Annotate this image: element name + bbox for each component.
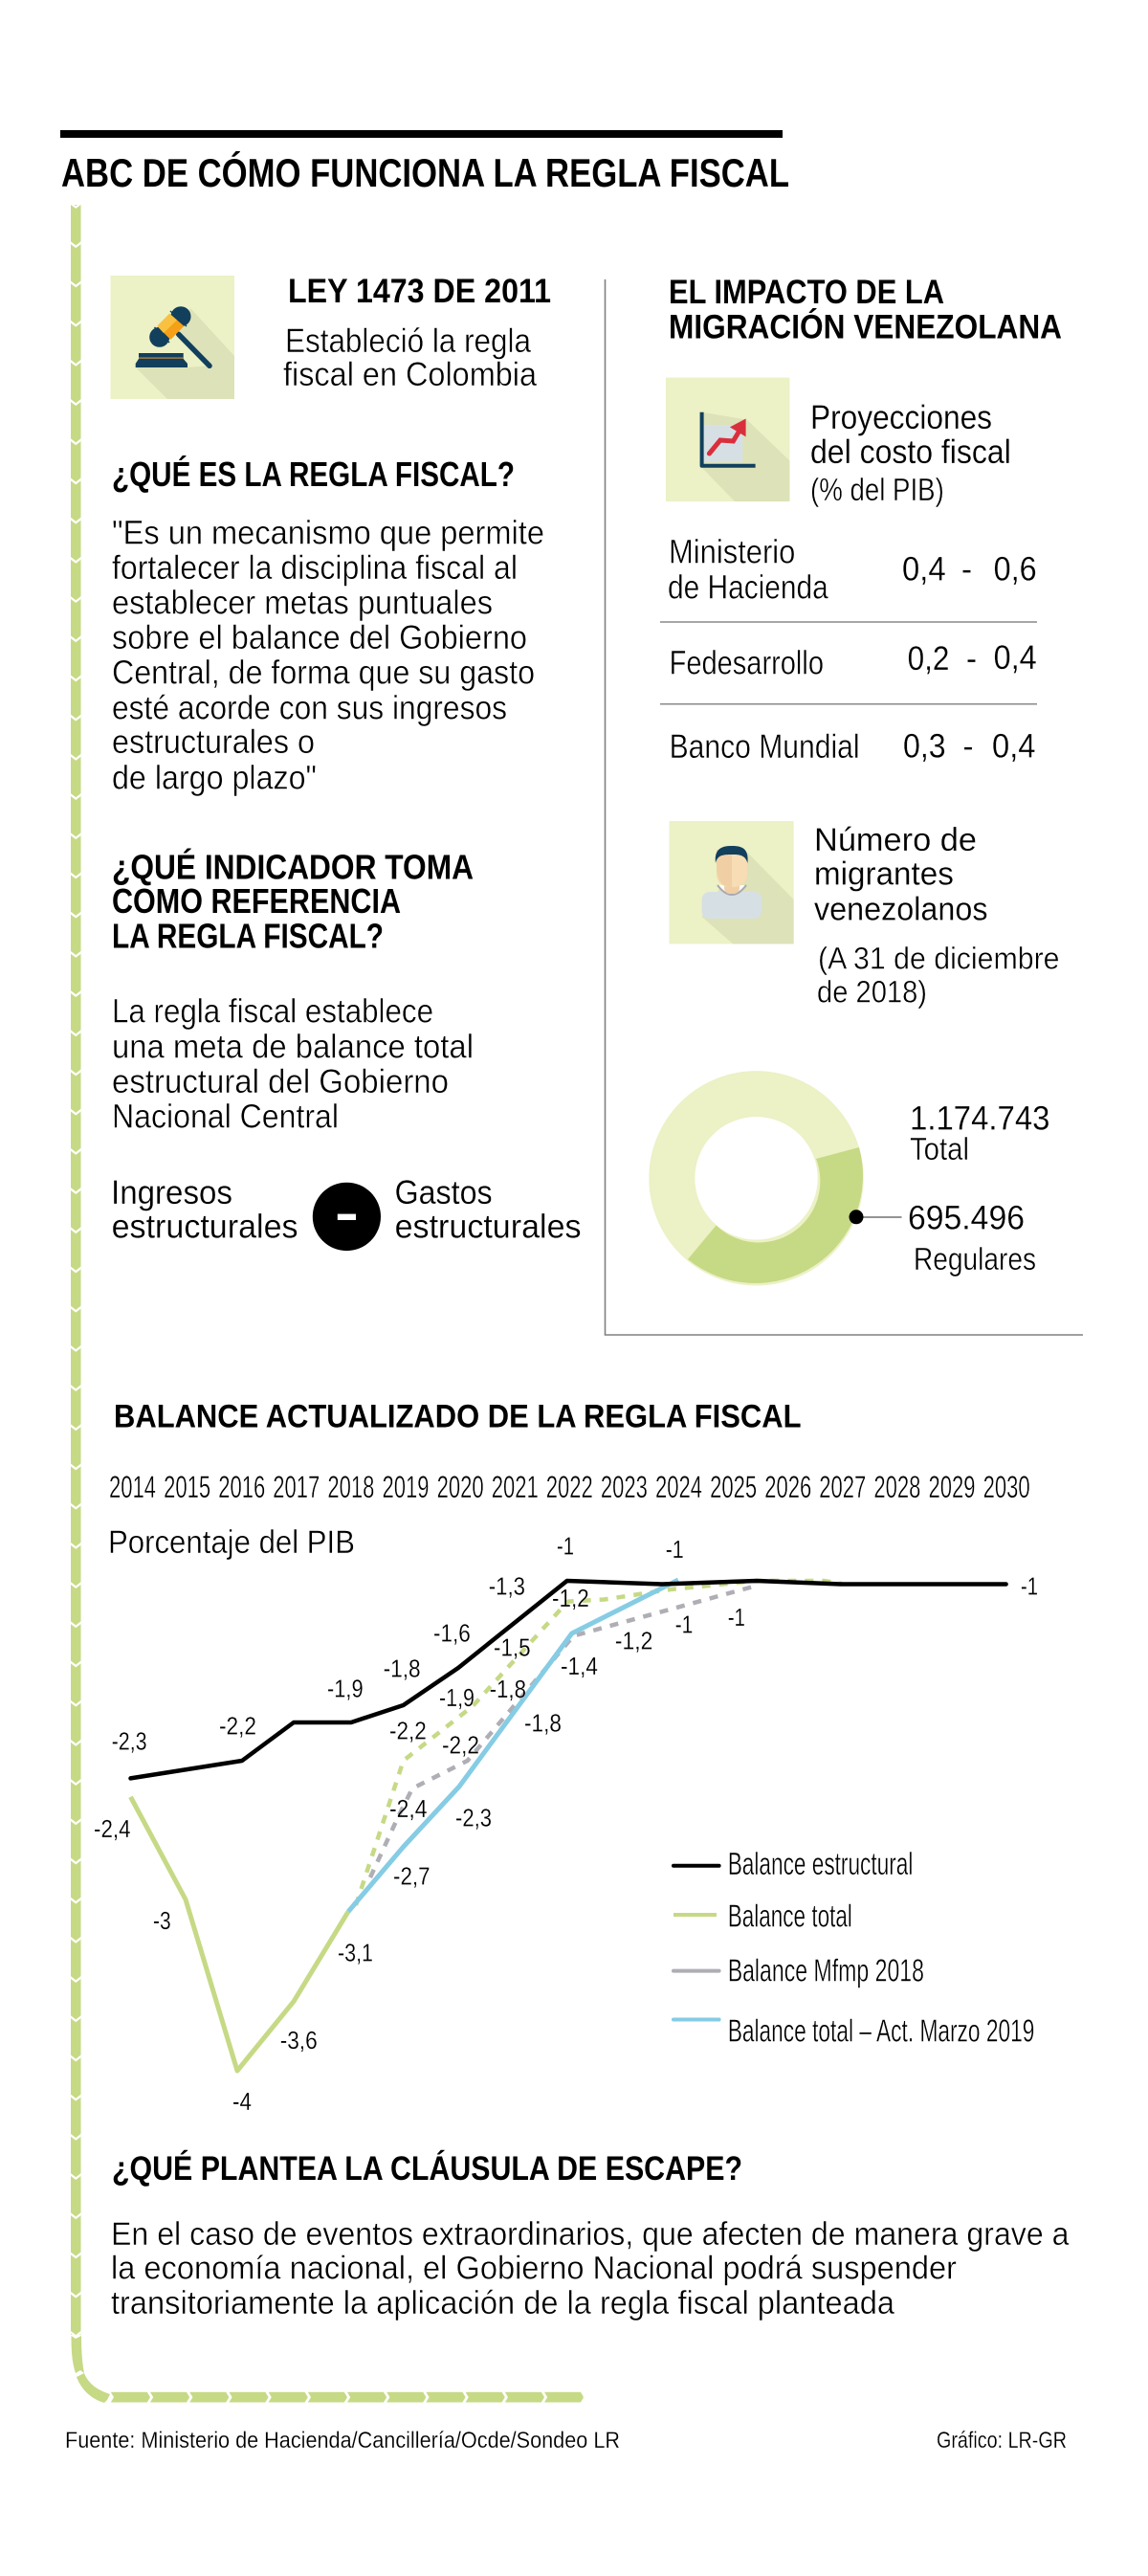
- donut labels: 1.174.743: [910, 1100, 1050, 1137]
- donut labels: Total: [910, 1131, 969, 1166]
- heading: impacto: EL IMPACTO DE LA: [669, 274, 944, 311]
- text: definition: esté acorde con sus ingresos: [112, 689, 507, 726]
- chart value labels: -2,4: [389, 1794, 427, 1823]
- chart legend: Balance Mfmp 2018: [728, 1952, 924, 1988]
- text: definition: estructurales o: [112, 723, 315, 761]
- text: ley description: [283, 322, 537, 393]
- icon: person: [670, 821, 794, 944]
- text: clausula de escape: En el caso de eventos extraordinarios, que afecten de manera grave a: [111, 2216, 1070, 2253]
- text: ley description: Estableció la regla: [285, 322, 531, 360]
- title: ABC DE CÓMO FUNCIONA LA REGLA FISCAL: [61, 149, 789, 195]
- table: costo fiscal: -: [962, 727, 974, 765]
- chart value labels: -1,8: [524, 1709, 562, 1738]
- heading: impacto: [669, 274, 1062, 346]
- chart legend: Balance estructural: [728, 1846, 913, 1881]
- chart axis: years: 2029: [928, 1470, 976, 1504]
- chart unit label: Porcentaje del PIB: [108, 1524, 355, 1561]
- chart value labels: -3,6: [280, 2026, 318, 2054]
- table: costo fiscal: 0,4: [994, 639, 1037, 677]
- heading: que indicador: ¿QUÉ INDICADOR TOMA: [112, 848, 474, 887]
- formula: ingresos menos gastos: [111, 1174, 582, 1251]
- text: definition: sobre el balance del Gobierno: [112, 619, 527, 656]
- text: indicador: La regla fiscal establece: [112, 993, 433, 1031]
- chart value labels: -2,2: [219, 1711, 256, 1740]
- chart axis: years: [109, 1470, 1030, 1504]
- chart value labels: -4: [232, 2087, 252, 2116]
- chart value labels: -1,4: [561, 1652, 598, 1680]
- series: balance mfmp dashed: [370, 1586, 757, 1877]
- chart value labels: -1,2: [552, 1584, 589, 1612]
- chart axis: years: 2016: [218, 1470, 265, 1504]
- text: proyecciones: del costo fiscal: [810, 433, 1011, 471]
- formula: ingresos menos gastos: estructurales: [112, 1209, 298, 1246]
- chart axis: years: 2015: [164, 1470, 210, 1504]
- text: ley description: fiscal en Colombia: [283, 356, 537, 393]
- table: costo fiscal: 0,3: [903, 727, 946, 765]
- icon: gavel: [111, 276, 234, 399]
- icon: chart: [666, 378, 789, 501]
- table: costo fiscal: de Hacienda: [668, 568, 828, 606]
- text: definition: establecer metas puntuales: [112, 584, 493, 621]
- text: proyecciones: [810, 399, 1011, 507]
- chart axis: years: 2025: [710, 1470, 757, 1504]
- text: clausula de escape: la economía nacional, el Gobierno Nacional podrá suspender: [111, 2251, 957, 2287]
- chart value labels: -1,8: [384, 1654, 421, 1682]
- heading: que indicador: LA REGLA FISCAL?: [112, 917, 384, 956]
- series: balance estructural: [130, 1581, 1006, 1778]
- text: definition: [112, 515, 544, 797]
- text: migrantes: venezolanos: [814, 892, 987, 928]
- chart axis: years: 2030: [983, 1470, 1030, 1504]
- donut labels: [908, 1100, 1050, 1277]
- green chevron path: [71, 205, 584, 2403]
- chart axis: years: 2018: [327, 1470, 374, 1504]
- text: clausula de escape: [111, 2216, 1070, 2321]
- text: migrantes: migrantes: [814, 856, 954, 893]
- text: definition: Central, de forma que su gasto: [112, 655, 535, 692]
- chart value labels: -1: [666, 1535, 684, 1564]
- heading: que es: ¿QUÉ ES LA REGLA FISCAL?: [112, 455, 515, 494]
- heading: balance: BALANCE ACTUALIZADO DE LA REGLA FISCAL: [114, 1399, 802, 1435]
- chart value labels: [94, 1531, 1038, 2116]
- table: costo fiscal: 0,4: [902, 550, 946, 588]
- chart value labels: -2,3: [112, 1726, 147, 1755]
- text: migrantes: Número de: [814, 822, 977, 858]
- chart value labels: -1,6: [433, 1619, 471, 1648]
- chart value labels: -3,1: [338, 1939, 373, 1967]
- chart value labels: -2,3: [455, 1803, 492, 1832]
- chart axis: years: 2019: [383, 1470, 429, 1504]
- chart value labels: -1: [728, 1603, 745, 1632]
- chart value labels: -2,4: [94, 1814, 130, 1843]
- chart value labels: -2,2: [389, 1717, 427, 1745]
- line chart: [130, 1580, 1006, 2071]
- heading: impacto: MIGRACIÓN VENEZOLANA: [669, 308, 1062, 346]
- chart value labels: -1: [1021, 1571, 1038, 1600]
- donut labels: 695.496: [908, 1199, 1025, 1236]
- text: indicador: estructural del Gobierno: [112, 1063, 449, 1100]
- chart axis: years: 2028: [873, 1470, 920, 1504]
- formula: ingresos menos gastos: Ingresos: [111, 1174, 232, 1211]
- text: proyecciones: Proyecciones: [810, 399, 992, 436]
- text: indicador: Nacional Central: [112, 1099, 339, 1136]
- table: costo fiscal: Banco Mundial: [670, 728, 860, 766]
- table: costo fiscal: 0,2: [908, 640, 949, 677]
- chart axis: years: 2021: [492, 1470, 539, 1504]
- heading: que indicador: COMO REFERENCIA: [112, 881, 401, 921]
- chart axis: years: 2020: [437, 1470, 484, 1504]
- chart value labels: -1,2: [615, 1626, 652, 1654]
- table: costo fiscal: -: [961, 550, 972, 588]
- table: costo fiscal: Ministerio: [669, 534, 795, 571]
- text: definition: "Es un mecanismo que permite: [112, 515, 544, 552]
- text: migrantes: (A 31 de diciembre: [818, 942, 1060, 976]
- chart value labels: -1,5: [494, 1632, 530, 1661]
- chart value labels: -1: [675, 1610, 693, 1638]
- chart legend: Balance total: [728, 1898, 852, 1933]
- series: balance total solid: [130, 1797, 348, 2071]
- chart value labels: -1,9: [327, 1674, 364, 1702]
- formula: ingresos menos gastos: Gastos: [395, 1174, 493, 1211]
- series: balance total dashed: [356, 1581, 842, 1905]
- series: balance total act marzo 2019: [348, 1580, 678, 1912]
- text: proyecciones: (% del PIB): [810, 472, 944, 507]
- source: Fuente: Ministerio de Hacienda/Cancillería/Ocde/Sondeo LR: [65, 2428, 620, 2454]
- panel frame: impacto: [605, 279, 1083, 1335]
- chart axis: years: 2017: [273, 1470, 320, 1504]
- chart value labels: -1,9: [439, 1683, 475, 1712]
- chart value labels: -1: [557, 1531, 574, 1560]
- credit: Gráfico: LR-GR: [937, 2428, 1067, 2454]
- chart axis: years: 2014: [109, 1470, 156, 1504]
- heading: clausula de escape: ¿QUÉ PLANTEA LA CLÁUSULA DE ESCAPE?: [112, 2149, 742, 2187]
- chart legend: [673, 1846, 1034, 2049]
- chart value labels: -2,2: [442, 1731, 479, 1760]
- text: definition: fortalecer la disciplina fiscal al: [112, 549, 518, 587]
- chart axis: years: 2026: [764, 1470, 811, 1504]
- donut chart: [672, 1094, 901, 1283]
- top rule: [60, 130, 783, 138]
- chart axis: years: 2024: [655, 1470, 702, 1504]
- table: costo fiscal: [660, 534, 1037, 766]
- table: costo fiscal: 0,6: [994, 550, 1037, 588]
- chart value labels: -1,3: [489, 1571, 525, 1600]
- text: clausula de escape: transitoriamente la aplicación de la regla fiscal planteada: [111, 2285, 894, 2321]
- table: costo fiscal: -: [966, 640, 977, 677]
- text: definition: de largo plazo": [112, 760, 317, 797]
- chart axis: years: 2023: [601, 1470, 648, 1504]
- donut labels: Regulares: [914, 1241, 1036, 1277]
- table: costo fiscal: Fedesarrollo: [670, 645, 824, 682]
- table: costo fiscal: 0,4: [992, 727, 1035, 765]
- formula: ingresos menos gastos: estructurales: [395, 1209, 582, 1246]
- chart axis: years: 2027: [819, 1470, 866, 1504]
- chart value labels: -1,8: [490, 1675, 526, 1703]
- text: migrantes: de 2018): [817, 974, 927, 1009]
- text: indicador: [112, 993, 474, 1136]
- chart value labels: -2,7: [393, 1862, 430, 1891]
- chart axis: years: 2022: [546, 1470, 593, 1504]
- text: migrantes: [814, 822, 1060, 1009]
- chart value labels: -3: [153, 1906, 171, 1935]
- heading: que indicador: [112, 848, 474, 956]
- heading: ley: LEY 1473 DE 2011: [288, 273, 551, 310]
- text: indicador: una meta de balance total: [112, 1029, 474, 1066]
